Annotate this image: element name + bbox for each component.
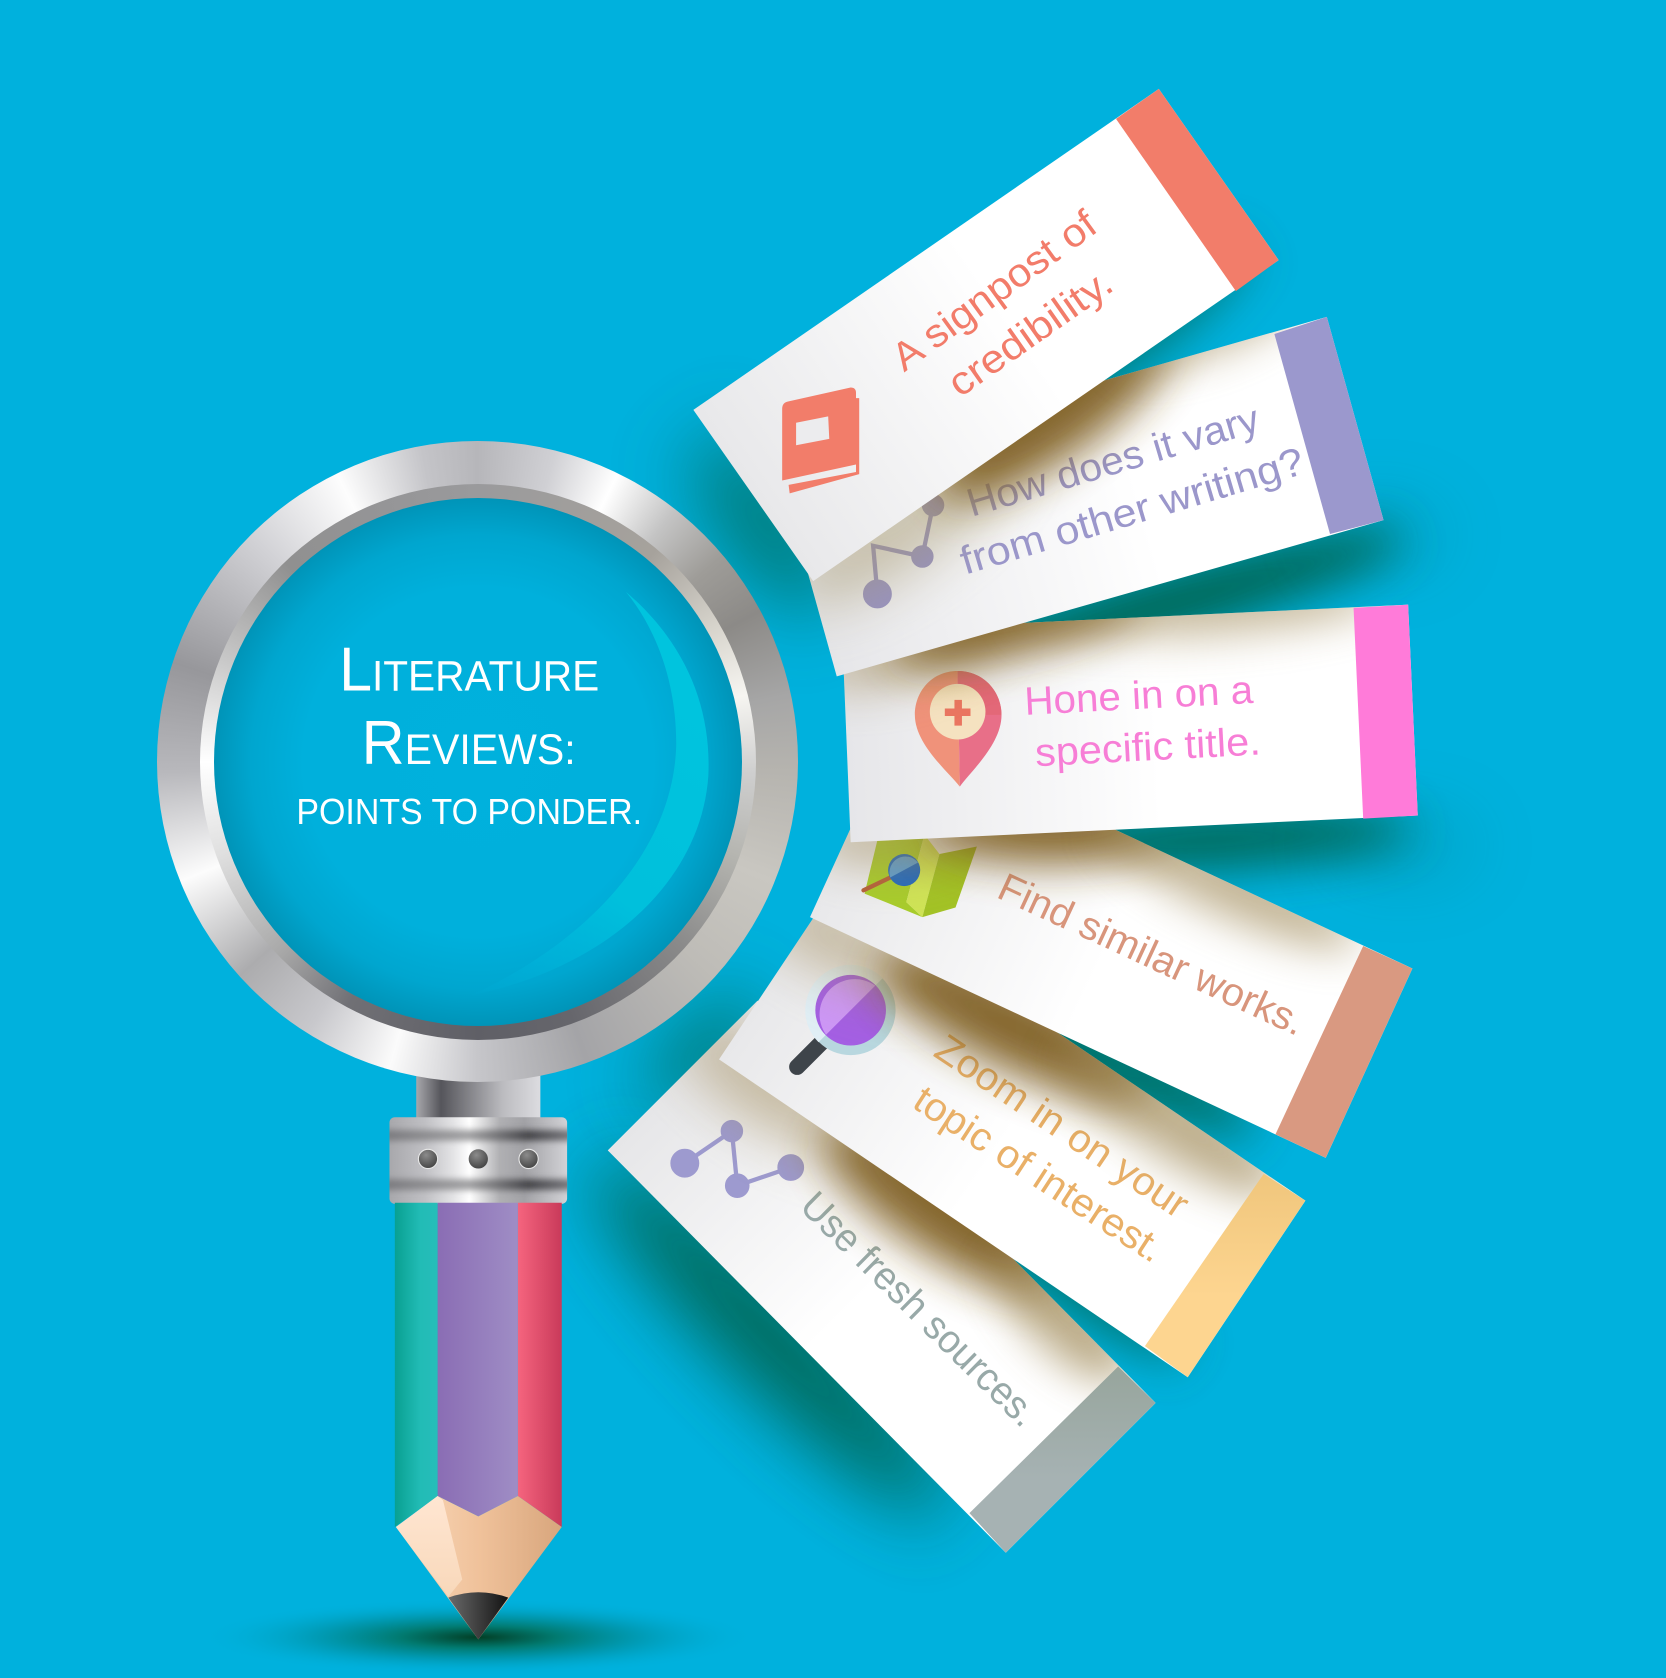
magnifier lens — [214, 498, 742, 1026]
magnifier bevel ring — [200, 484, 756, 1040]
card 4: find similar works — [810, 828, 1412, 1158]
icon: map — [863, 835, 977, 917]
shadow on card 6 — [661, 996, 1149, 1401]
text: signpost: A signpost of — [884, 201, 1106, 380]
magnifier collar — [379, 1117, 578, 1204]
magnifier neck — [416, 1070, 540, 1121]
pencil green stripe — [395, 1203, 438, 1527]
stripe — [1275, 946, 1412, 1158]
text: use fresh sources: Use fresh sources. — [792, 1183, 1047, 1435]
card 1: a signpost of credibility — [693, 89, 1279, 581]
foreground artwork — [299, 88, 1418, 1640]
icon: map pin — [915, 671, 1002, 787]
text: zoom in: topic of interest. — [906, 1077, 1172, 1271]
pencil wood tip — [396, 1496, 562, 1639]
icon: network — [863, 494, 944, 608]
pencil — [395, 1203, 562, 1639]
title — [296, 635, 642, 832]
card 2: how does it vary — [808, 316, 1384, 676]
stripe — [1145, 1174, 1305, 1377]
shadow on card 4 — [828, 830, 1370, 975]
card 6: use fresh sources — [608, 996, 1156, 1553]
shadow on card 3 — [844, 606, 1382, 714]
lens crescent highlight — [471, 592, 709, 995]
text: signpost: credibility. — [940, 260, 1121, 406]
text: find similar works: Find similar works. — [991, 865, 1312, 1045]
stripe — [969, 1367, 1156, 1553]
pencil red stripe — [518, 1203, 562, 1527]
text: how does it vary: How does it vary — [962, 397, 1265, 526]
text: how does it vary: from other writing? — [955, 439, 1309, 583]
text: hone in: specific title. — [1034, 719, 1262, 775]
magnifier outer ring — [157, 441, 798, 1082]
text: hone in — [1023, 668, 1262, 775]
shadow on card 5 — [774, 918, 1294, 1220]
stripe — [1274, 317, 1384, 534]
card 3: hone in — [844, 604, 1418, 842]
pencil lead — [448, 1592, 508, 1639]
ground shadow — [200, 1599, 756, 1676]
title line 1: LITERATURE — [339, 635, 599, 704]
pencil purple stripe — [438, 1203, 518, 1516]
shadow group — [565, 219, 1477, 1543]
shadow on card 2 — [808, 321, 1313, 632]
title line 2: REVIEWS: — [362, 709, 576, 778]
stripe — [1116, 89, 1279, 291]
text: how does it vary — [955, 397, 1309, 583]
text: hone in: Hone in on a — [1023, 668, 1255, 724]
stripe — [1354, 605, 1418, 819]
subtitle: POINTS TO PONDER. — [296, 791, 642, 832]
icon: network — [671, 1120, 804, 1197]
text: zoom in: Zoom in on your — [927, 1026, 1197, 1227]
icon: book — [782, 387, 859, 493]
card 5: zoom in on your topic — [719, 872, 1305, 1377]
icon: magnifier — [797, 965, 896, 1067]
